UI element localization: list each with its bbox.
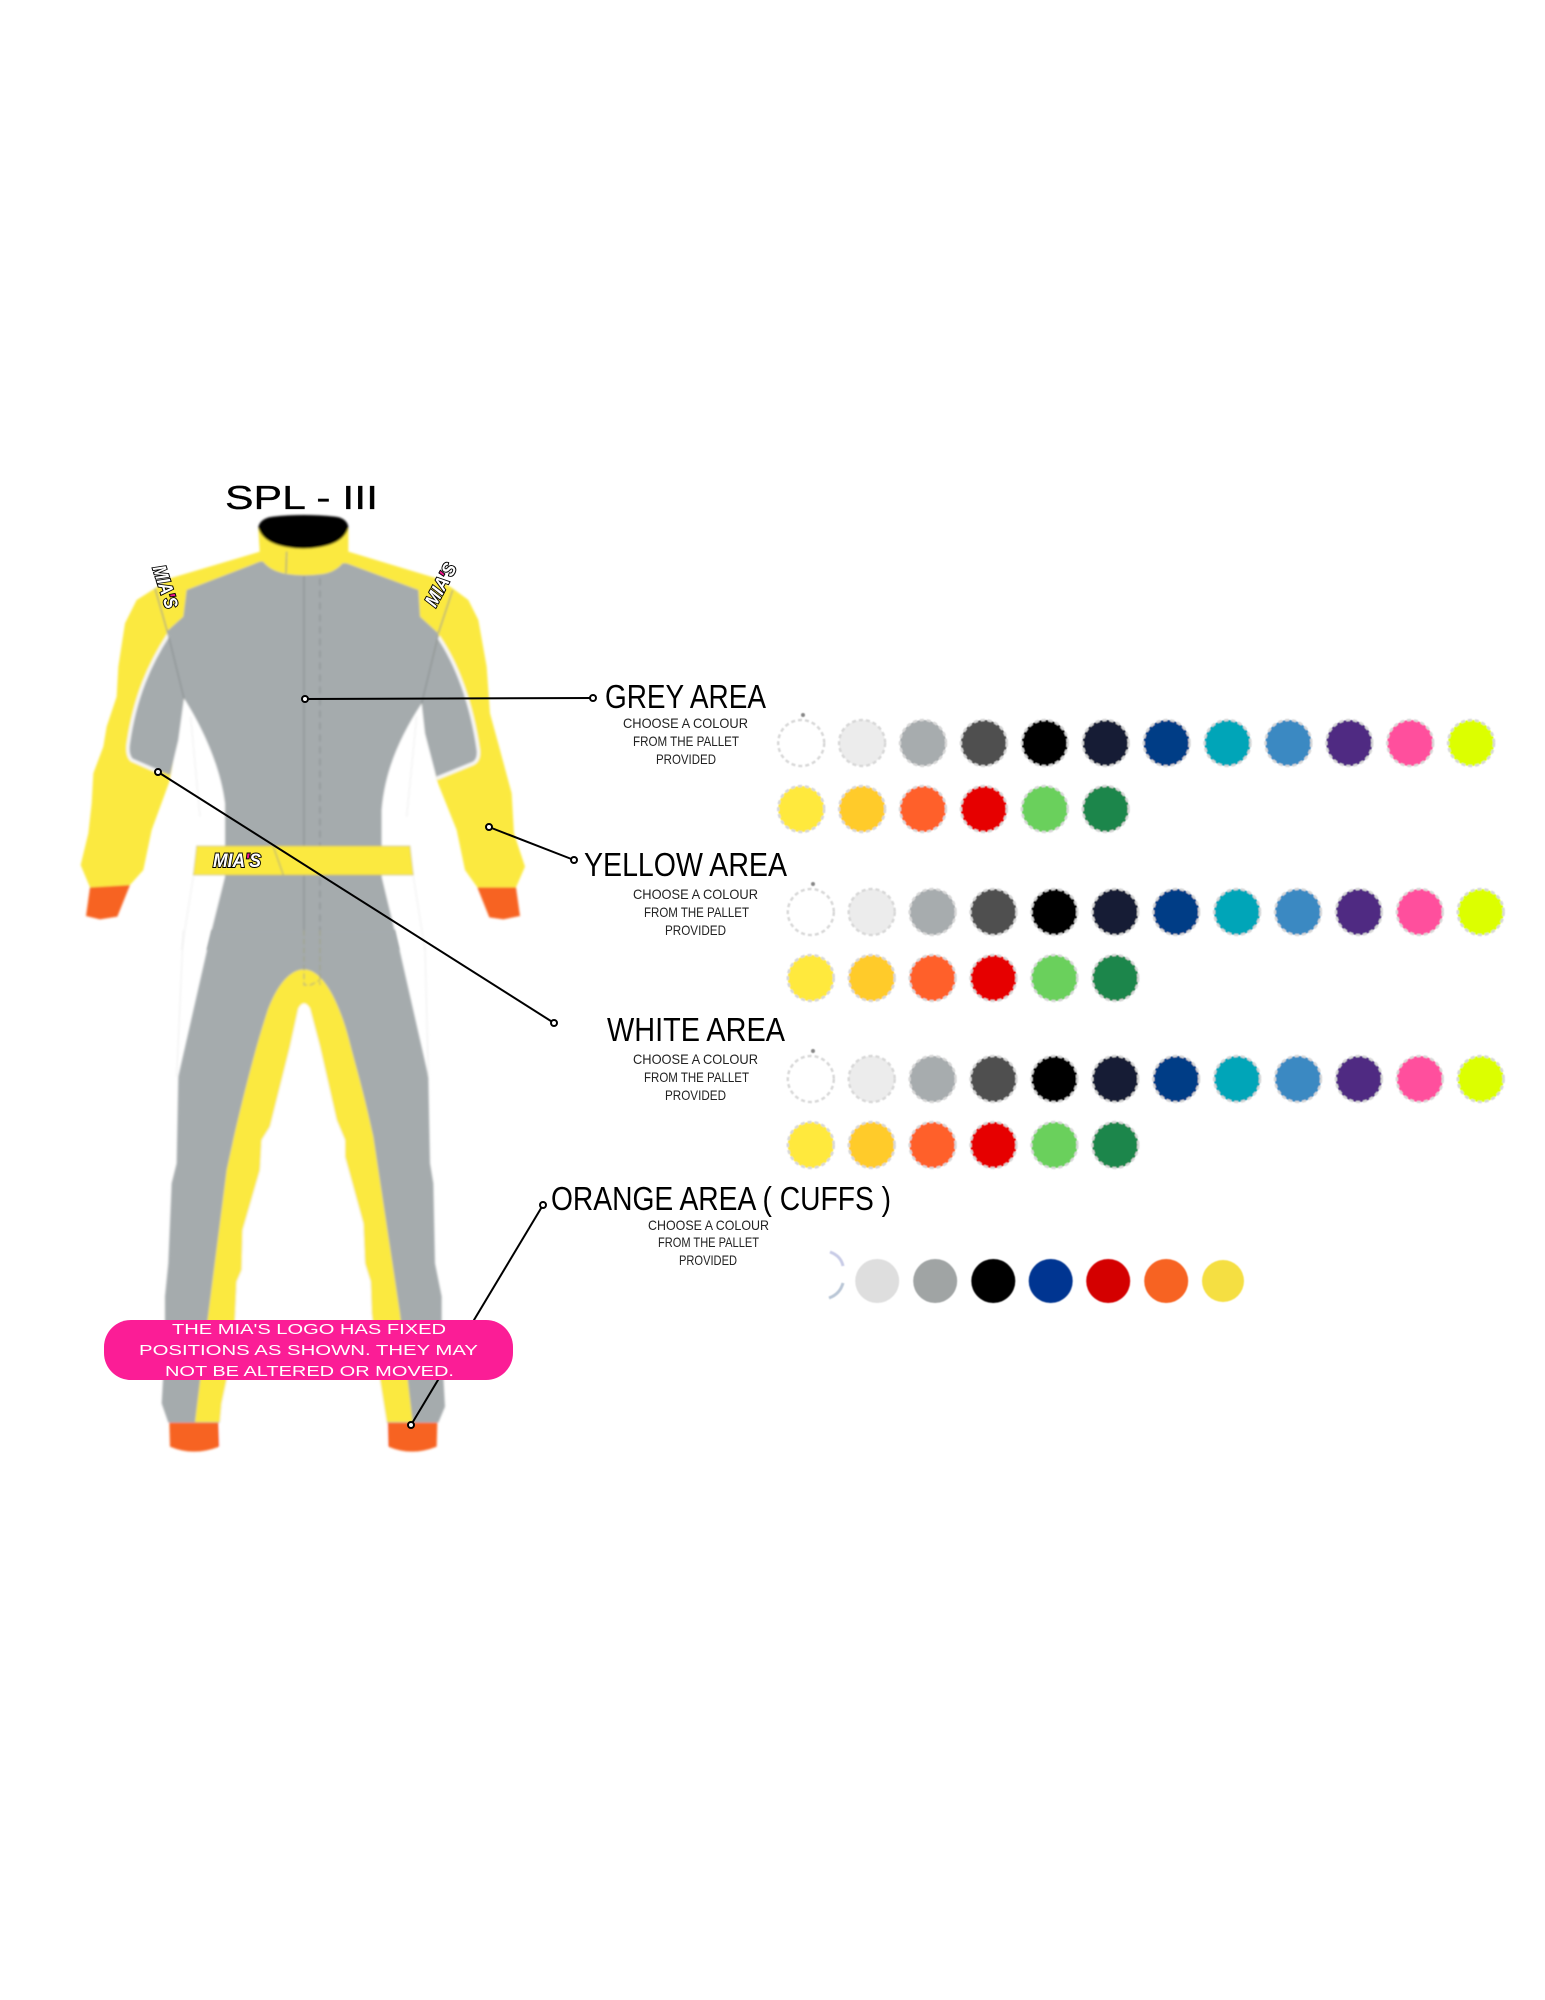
belt logo: MIA'S xyxy=(213,851,261,872)
belt seam xyxy=(273,847,283,875)
connector: grey area xyxy=(302,695,596,702)
left shoulder logo: MIA'S xyxy=(148,563,181,612)
palette: orange area xyxy=(829,1252,1244,1303)
callout: logo positions: THE MIA'S LOGO HAS FIXED xyxy=(172,1321,446,1338)
instructions: white area xyxy=(633,1051,758,1103)
yellow collar xyxy=(258,528,348,575)
instructions: orange area: PROVIDED xyxy=(679,1252,737,1268)
instructions: yellow area: CHOOSE A COLOUR xyxy=(633,886,758,902)
heading: yellow area: YELLOW AREA xyxy=(584,846,787,883)
left orange wrist cuff xyxy=(86,885,130,919)
yellow belt xyxy=(193,846,413,875)
instructions: yellow area xyxy=(633,886,758,938)
connector: orange area xyxy=(408,1202,546,1428)
instructions: white area: CHOOSE A COLOUR xyxy=(633,1051,758,1067)
black neck opening xyxy=(258,515,348,549)
instructions: yellow area: PROVIDED xyxy=(665,922,726,938)
connector: yellow area xyxy=(486,824,577,863)
title: SPL - III xyxy=(225,479,378,516)
instructions: grey area: CHOOSE A COLOUR xyxy=(623,715,748,731)
instructions: grey area: FROM THE PALLET xyxy=(633,733,739,749)
right shoulder logo: MIA'S xyxy=(421,560,462,610)
yellow sleeves and shoulders xyxy=(81,552,525,887)
palette: yellow area xyxy=(788,882,1504,1001)
right white piping xyxy=(437,637,478,778)
instructions: yellow area: FROM THE PALLET xyxy=(644,904,749,920)
palette: grey area xyxy=(778,713,1494,832)
grey left arm panel xyxy=(128,635,184,775)
instructions: grey area: PROVIDED xyxy=(656,751,716,767)
instructions: orange area: CHOOSE A COLOUR xyxy=(648,1217,769,1233)
grey right arm panel xyxy=(422,637,478,778)
instructions: orange area xyxy=(648,1217,769,1268)
right orange ankle cuff xyxy=(388,1423,437,1452)
seams xyxy=(155,552,453,950)
instructions: orange area: FROM THE PALLET xyxy=(658,1234,759,1250)
instructions: grey area xyxy=(623,715,748,767)
grey torso xyxy=(167,562,438,950)
left orange ankle cuff xyxy=(169,1423,219,1452)
callout: logo positions xyxy=(104,1320,513,1380)
side seams xyxy=(177,930,428,1077)
instructions: white area: FROM THE PALLET xyxy=(644,1069,749,1085)
suit upper body xyxy=(81,515,525,950)
suit lower body xyxy=(162,930,445,1452)
grey legs xyxy=(162,930,445,1423)
white side panels xyxy=(171,698,437,950)
connector: white area xyxy=(155,769,557,1026)
white gap between legs xyxy=(220,1003,387,1450)
callout: logo positions: NOT BE ALTERED OR MOVED. xyxy=(165,1363,454,1380)
left white piping xyxy=(128,635,168,772)
yellow inner leg stripes xyxy=(195,969,413,1422)
crotch seam xyxy=(304,930,320,985)
heading: white area: WHITE AREA xyxy=(607,1011,785,1048)
right orange wrist cuff xyxy=(477,887,520,919)
instructions: white area: PROVIDED xyxy=(665,1087,726,1103)
racing suit illustration xyxy=(81,515,525,1452)
heading: grey area: GREY AREA xyxy=(605,678,766,715)
callout: logo positions: POSITIONS AS SHOWN. THEY MAY xyxy=(139,1342,478,1359)
palette: white area xyxy=(788,1049,1504,1168)
heading: orange area: ORANGE AREA ( CUFFS ) xyxy=(551,1180,891,1217)
